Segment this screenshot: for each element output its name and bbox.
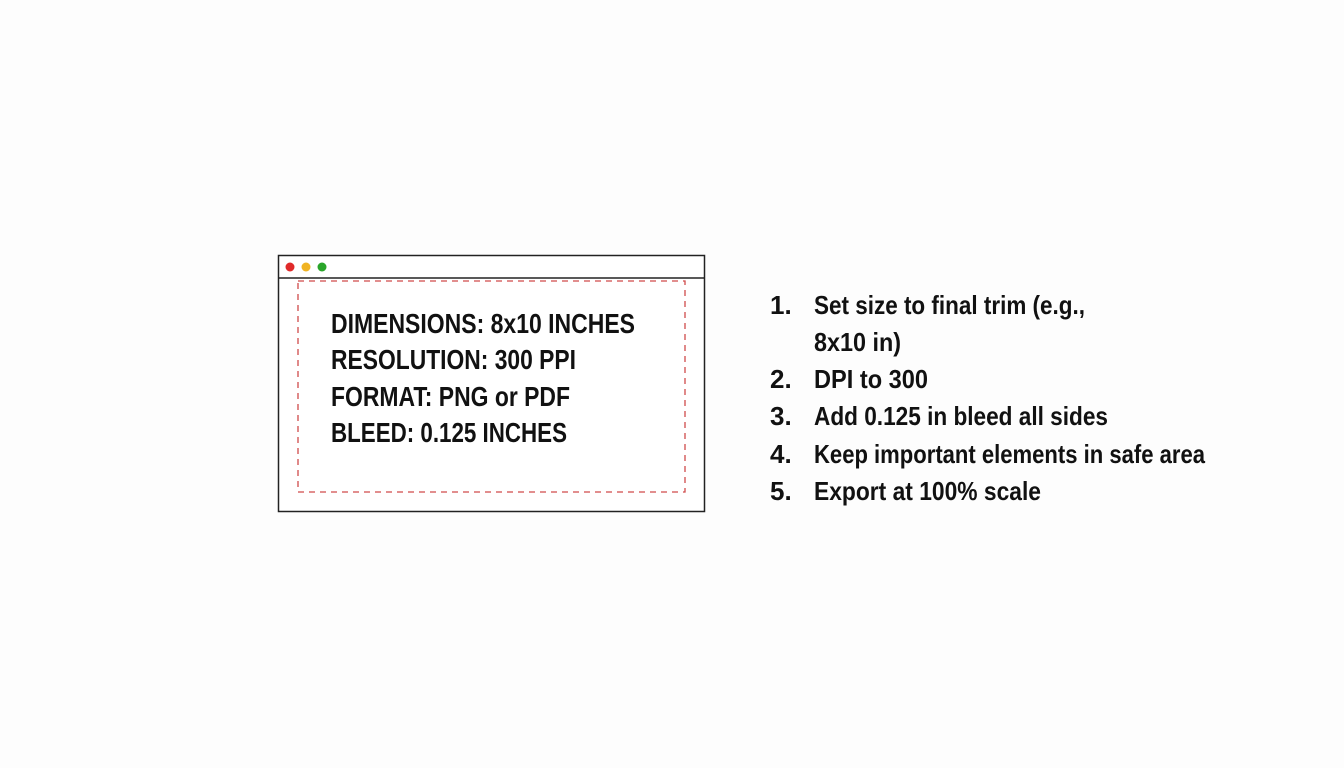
bleed guide: dashed rectangle [298,281,685,492]
text block: print specs: FORMAT: PNG or PDF [331,381,570,412]
text block: numbered steps: 1. [770,290,792,320]
text block: numbered steps: Keep important elements in safe area [814,439,1205,469]
text block: numbered steps: 3. [770,401,792,431]
text block: print specs: DIMENSIONS: 8x10 INCHES [331,308,635,339]
text block: print specs: BLEED: 0.125 INCHES [331,417,567,448]
text block: print specs [331,308,635,448]
text block: numbered steps: Add 0.125 in bleed all sides [814,401,1108,431]
text block: numbered steps: Set size to final trim (e.g., [814,290,1085,320]
text block: numbered steps [770,290,1205,506]
panel: print spec window [278,256,704,512]
text block: print specs: RESOLUTION: 300 PPI [331,344,576,375]
text block: numbered steps: Export at 100% scale [814,476,1041,506]
text block: numbered steps: 4. [770,439,792,469]
text block: numbered steps: 8x10 in) [814,327,901,357]
text block: numbered steps: 5. [770,476,792,506]
icon: window dots [286,262,326,272]
text block: numbered steps: DPI to 300 [814,364,928,394]
text block: numbered steps: 2. [770,364,792,394]
